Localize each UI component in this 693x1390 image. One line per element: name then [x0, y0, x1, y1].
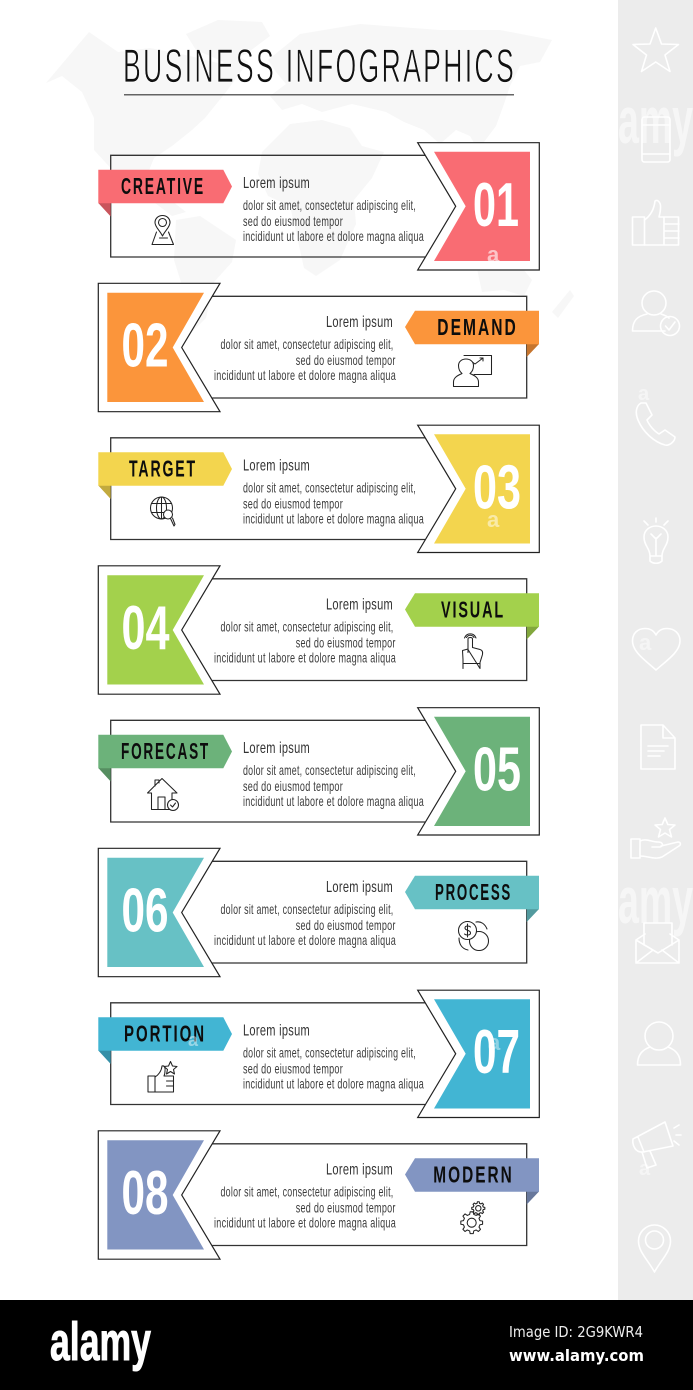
number panel 03: 03 — [473, 454, 521, 522]
number panel 04 — [98, 566, 220, 694]
text block — [243, 175, 424, 244]
icon: smartphone — [642, 117, 670, 162]
icon: presenter with chart — [454, 356, 492, 386]
text block — [243, 1022, 424, 1092]
icon: gears — [461, 1202, 485, 1234]
text block: dolor sit amet, consectetur adipiscing elit, — [243, 197, 416, 213]
icon: user with check — [632, 291, 680, 336]
ribbon: target — [98, 452, 232, 499]
row 04: visual — [98, 566, 539, 694]
icon: megaphone — [633, 1122, 681, 1168]
ribbon: demand: DEMAND — [437, 314, 518, 340]
row 03: target — [98, 425, 539, 552]
ribbon: creative: CREATIVE — [121, 173, 205, 199]
text block: incididunt ut labore et dolore magna aliqua — [214, 932, 396, 948]
background world map — [46, 20, 574, 332]
text block: dolor sit amet, consectetur adipiscing elit, — [243, 762, 416, 778]
number panel 02 — [98, 283, 220, 412]
website: www.alamy.com — [509, 1346, 644, 1365]
icon: user — [638, 1022, 680, 1065]
text block: Lorem ipsum — [243, 1022, 310, 1040]
image id: Image ID: 2G9KWR4 — [509, 1323, 643, 1341]
text block: sed do eiusmod tempor — [296, 1200, 396, 1216]
text block: dolor sit amet, consectetur adipiscing elit, — [220, 336, 394, 352]
text block — [243, 740, 424, 809]
number panel 01: 01 — [473, 171, 519, 240]
text block: dolor sit amet, consectetur adipiscing elit, — [220, 1184, 394, 1200]
text block: incididunt ut labore et dolore magna aliqua — [243, 1076, 424, 1092]
text block: incididunt ut labore et dolore magna aliqua — [214, 650, 396, 666]
footer band — [0, 1300, 693, 1390]
ribbon: forecast: FORECAST — [121, 738, 210, 764]
text block: incididunt ut labore et dolore magna aliqua — [243, 510, 424, 526]
text block: incididunt ut labore et dolore magna aliqua — [214, 367, 396, 383]
text block — [214, 1162, 396, 1230]
number panel 07: 07 — [473, 1018, 520, 1087]
ribbon: visual: VISUAL — [441, 596, 505, 622]
row 02: demand — [98, 283, 539, 412]
text block: sed do eiusmod tempor — [243, 496, 343, 512]
ribbon: target: TARGET — [129, 456, 197, 482]
ribbon: modern — [405, 1158, 539, 1204]
watermarks: a — [639, 1158, 651, 1180]
watermarks: a — [487, 242, 500, 267]
number panel 06 — [98, 848, 220, 977]
icon: globe with magnifier — [150, 497, 175, 526]
ribbon: demand — [405, 311, 539, 357]
icon: light bulb — [644, 518, 668, 563]
text block: Lorem ipsum — [326, 314, 393, 331]
watermarks: a — [487, 507, 500, 532]
text block: sed do eiusmod tempor — [243, 778, 343, 794]
number panel 08: 08 — [122, 1159, 168, 1228]
number panel 07 — [418, 990, 539, 1118]
icon: map pin — [152, 216, 174, 244]
icon: envelope — [636, 923, 679, 963]
text block: dolor sit amet, consectetur adipiscing elit, — [243, 480, 416, 496]
number panel 03 — [418, 425, 539, 552]
row 08: modern — [98, 1131, 539, 1259]
text block: sed do eiusmod tempor — [296, 634, 396, 650]
text block: sed do eiusmod tempor — [296, 352, 396, 368]
icon: thumbs up with star — [148, 1062, 177, 1092]
watermarks — [188, 83, 693, 1180]
text block — [214, 879, 396, 948]
row 05: forecast — [98, 708, 539, 835]
text block: Lorem ipsum — [243, 175, 310, 192]
icon: hand with star — [631, 818, 680, 858]
number panel 02: 02 — [122, 312, 168, 380]
number panel 05: 05 — [473, 736, 521, 804]
number panel 04: 04 — [122, 594, 170, 663]
icon: map pin — [638, 1225, 670, 1272]
watermarks: a — [188, 1030, 199, 1050]
row 06: process — [98, 848, 539, 977]
icon: heart — [632, 628, 680, 670]
ribbon: forecast — [98, 735, 232, 782]
icon: thumbs up — [632, 200, 679, 245]
text block: Lorem ipsum — [326, 1162, 393, 1178]
text block: incididunt ut labore et dolore magna aliqua — [243, 228, 424, 244]
right sidebar — [618, 0, 693, 1300]
icon: telephone handset — [636, 403, 675, 445]
ribbon: process: PROCESS — [435, 879, 512, 905]
watermarks: a — [638, 383, 650, 405]
text block — [214, 314, 396, 383]
icon: touch gesture hand — [462, 634, 483, 668]
ribbon: portion: PORTION — [124, 1020, 206, 1046]
text block: sed do eiusmod tempor — [243, 213, 343, 229]
icon: star — [633, 28, 678, 72]
ribbon: modern: MODERN — [433, 1162, 514, 1188]
number panel 01 — [418, 143, 539, 270]
ribbon: creative — [98, 170, 232, 216]
text block: Lorem ipsum — [243, 740, 310, 757]
icon: coins — [458, 922, 488, 950]
text block: Lorem ipsum — [326, 879, 393, 896]
ribbon: portion — [98, 1017, 232, 1064]
text block: incididunt ut labore et dolore magna aliqua — [243, 793, 424, 809]
icon: document — [641, 725, 675, 769]
row 07: portion — [98, 990, 539, 1118]
number panel 05 — [418, 708, 539, 835]
ribbon: process — [405, 876, 539, 922]
watermarks: a — [639, 630, 652, 655]
number panel 06: 06 — [122, 876, 168, 946]
icon: house with check — [148, 778, 178, 810]
text block: dolor sit amet, consectetur adipiscing elit, — [220, 901, 394, 917]
ribbon: visual — [405, 593, 539, 640]
alamy logo: alamy — [50, 1312, 151, 1372]
text block: dolor sit amet, consectetur adipiscing elit, — [243, 1044, 416, 1060]
text block: sed do eiusmod tempor — [243, 1060, 343, 1076]
text block: dolor sit amet, consectetur adipiscing elit, — [220, 618, 394, 634]
watermarks: a — [488, 1030, 501, 1055]
text block: Lorem ipsum — [326, 596, 393, 614]
number panel 08 — [98, 1131, 220, 1259]
text block — [214, 596, 396, 666]
text block — [243, 458, 424, 526]
text block: incididunt ut labore et dolore magna aliqua — [214, 1214, 396, 1230]
row 01: creative — [98, 143, 539, 270]
text block: sed do eiusmod tempor — [296, 917, 396, 933]
text block: Lorem ipsum — [243, 458, 310, 474]
